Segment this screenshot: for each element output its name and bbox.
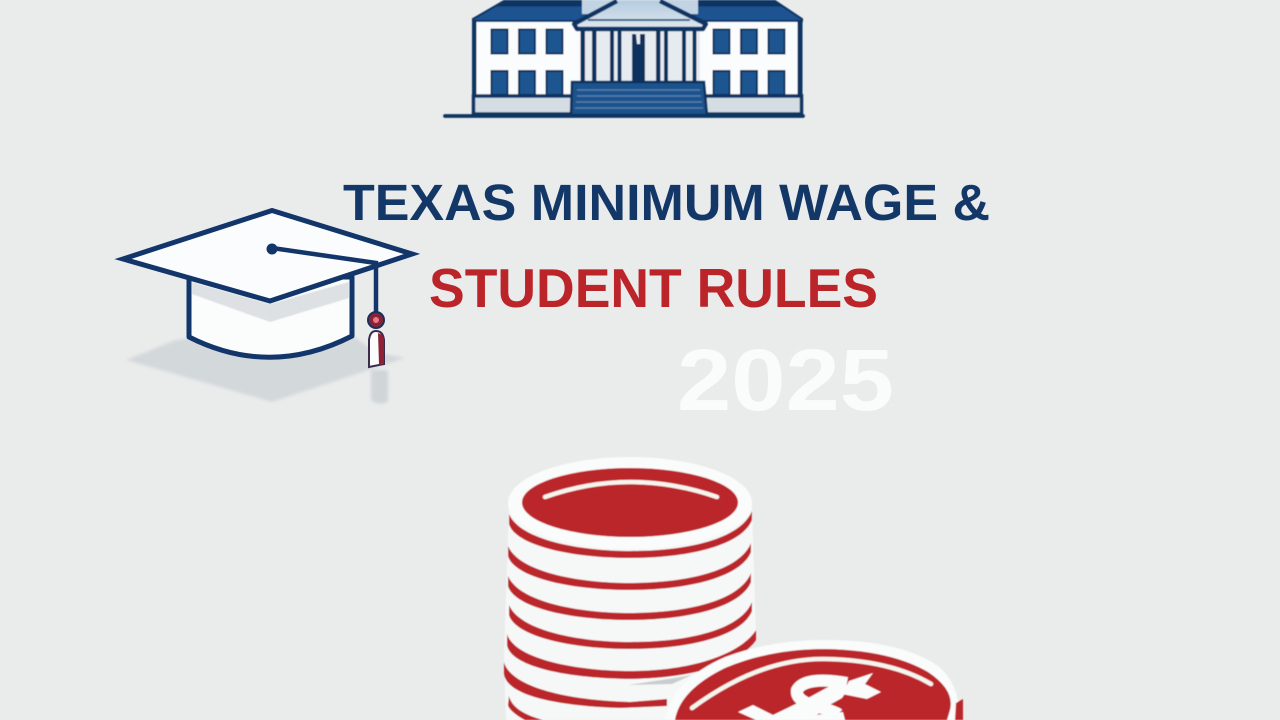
left wing windows: [492, 30, 562, 95]
coin edge bands: [504, 511, 756, 720]
top coin face: [522, 468, 738, 537]
coin bodies: [504, 503, 756, 720]
shadow under stack: [628, 675, 692, 685]
dollar coin face: [675, 649, 951, 720]
ground line: [445, 114, 803, 118]
icon: university building: [445, 0, 803, 116]
cap shadow: [126, 335, 405, 404]
mortarboard: [123, 210, 412, 301]
entrance stairs: [571, 82, 707, 115]
title line 1: TEXAS MINIMUM WAGE &: [343, 174, 990, 231]
portico pediment: [574, 0, 706, 29]
dollar coin highlight: [692, 659, 931, 708]
title: [343, 174, 990, 429]
top coin highlight: [545, 482, 717, 497]
icon: coin stack: [504, 457, 963, 720]
top coin rim: [508, 457, 752, 549]
tassel: [368, 312, 384, 367]
shadow under mortarboard: [192, 282, 349, 322]
building wings: [472, 1, 802, 114]
right wing windows: [714, 30, 784, 95]
icon: graduation cap: [123, 210, 412, 404]
cap base: [189, 277, 352, 357]
year: 2025: [677, 332, 894, 429]
title line 2: STUDENT RULES: [429, 257, 878, 319]
dollar coin edge: [955, 699, 963, 720]
dollar sign: [738, 673, 881, 720]
central portico columns: [580, 28, 700, 83]
dollar coin rim: [665, 640, 960, 720]
tassel cord: [272, 248, 376, 314]
